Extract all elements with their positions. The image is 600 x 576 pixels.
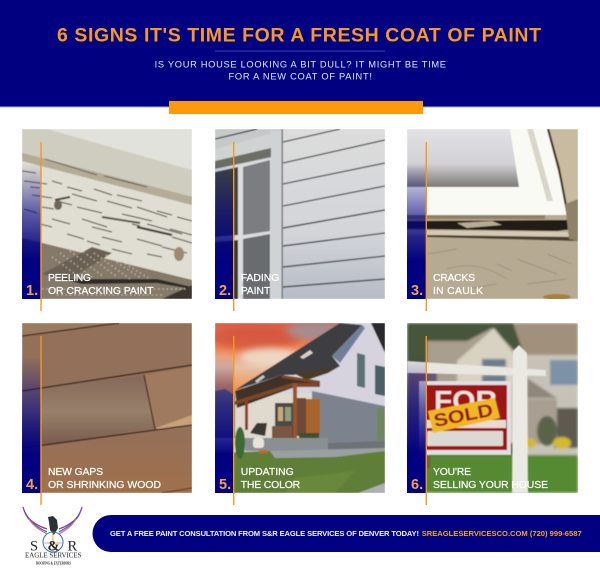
number 1: 1. — [26, 283, 38, 299]
icon: eagle — [23, 507, 82, 552]
subtitle — [155, 60, 446, 81]
logo: S&R Eagle Services — [23, 507, 82, 566]
label 5 — [241, 467, 301, 491]
connector line 6 — [426, 336, 427, 505]
orange accent bar — [169, 101, 423, 114]
label 4: OR SHRINKING WOOD — [48, 480, 161, 491]
label 2: FADING — [241, 273, 279, 284]
logo wordmark: & — [48, 538, 60, 554]
panel 3: cracks in caulk — [407, 129, 578, 300]
house walls — [235, 323, 385, 493]
panel 6: you're selling your house — [407, 323, 578, 493]
label 2 — [241, 273, 279, 297]
label 2: PAINT — [241, 286, 271, 297]
panel 2: fading paint — [215, 129, 385, 299]
connector line 4 — [40, 336, 42, 505]
panel 5: updating the color — [210, 322, 385, 493]
label 5: UPDATING — [241, 467, 294, 478]
logo wordmark — [25, 538, 82, 566]
panel 1: peeling or cracking paint — [22, 129, 192, 299]
label 1 — [48, 273, 154, 297]
panel 4: new gaps or shrinking wood — [22, 323, 192, 493]
number 3: 3. — [411, 283, 423, 299]
number 6: 6. — [411, 477, 423, 493]
call to action pill — [92, 515, 600, 552]
subtitle: FOR A NEW COAT OF PAINT! — [228, 71, 372, 81]
logo wordmark: EAGLE SERVICES — [25, 550, 82, 560]
logo wordmark: ROOFING & EXTERIORS — [36, 560, 72, 566]
connector line 1 — [40, 142, 42, 311]
label 4: NEW GAPS — [48, 467, 103, 478]
panel 6: you're selling your house: FOR — [434, 385, 497, 416]
connector line 3 — [426, 142, 427, 311]
number 5: 5. — [219, 477, 231, 493]
label 6: YOU'RE — [433, 467, 471, 478]
label 3: CRACKS — [433, 273, 475, 284]
panel 6: you're selling your house: SOLD — [432, 400, 495, 431]
label 5: THE COLOR — [241, 480, 301, 491]
label 6: SELLING YOUR HOUSE — [433, 480, 548, 491]
subtitle: IS YOUR HOUSE LOOKING A BIT DULL? IT MIGHT BE TIME — [155, 60, 446, 70]
number 2: 2. — [219, 283, 231, 299]
connector line 5 — [233, 336, 234, 505]
cta text: GET A FREE PAINT CONSULTATION FROM S&R EAGLE SERVICES OF DENVER TODAY! — [110, 529, 419, 538]
connector line 2 — [233, 142, 234, 311]
label 3: IN CAULK — [433, 286, 483, 297]
label 1: OR CRACKING PAINT — [48, 286, 154, 297]
label 4 — [48, 467, 161, 491]
label 6 — [433, 467, 548, 491]
title: 6 SIGNS IT'S TIME FOR A FRESH COAT OF PAINT — [57, 24, 541, 46]
logo wordmark: S — [30, 538, 38, 554]
label 3 — [433, 273, 483, 297]
logo wordmark: R — [68, 538, 78, 554]
number 4: 4. — [26, 477, 38, 493]
header banner — [0, 0, 600, 108]
contact details: SREAGLESERVICESCO.COM (720) 999-6587 — [422, 529, 582, 538]
label 1: PEELING — [48, 273, 91, 284]
